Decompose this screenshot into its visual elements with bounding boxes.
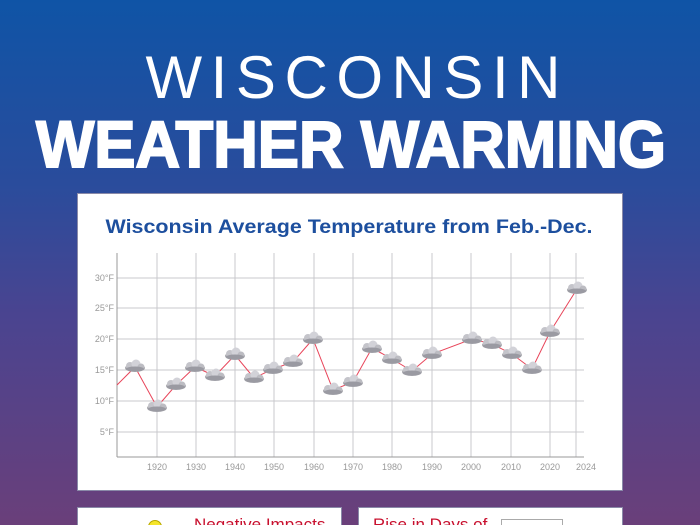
chart title: Wisconsin Average Temperature from Feb.-Dec. <box>106 217 592 238</box>
line chart: 1970 <box>343 462 363 472</box>
line chart: 1940 <box>225 462 245 472</box>
line chart: 25°F <box>95 303 115 313</box>
title: WISCONSIN <box>146 44 560 111</box>
line chart: 15°F <box>95 365 115 375</box>
line chart: 1990 <box>422 462 442 472</box>
panel: rise in days <box>358 507 623 525</box>
line chart: 2020 <box>540 462 560 472</box>
line chart: 2024 <box>576 462 596 472</box>
line chart: 2010 <box>501 462 521 472</box>
line chart: 5°F <box>100 427 114 437</box>
line chart: 1930 <box>186 462 206 472</box>
box <box>501 519 563 525</box>
line chart: 30°F <box>95 273 115 283</box>
line chart: 1950 <box>264 462 284 472</box>
line chart: 1920 <box>147 462 167 472</box>
panel: negative impacts <box>77 507 342 525</box>
icon: sun <box>148 520 162 525</box>
line chart: 1980 <box>382 462 402 472</box>
panel: temperature chart <box>77 193 623 491</box>
title: WEATHER WARMING <box>36 107 666 180</box>
line chart: 1960 <box>304 462 324 472</box>
line chart: 2000 <box>461 462 481 472</box>
line chart: 10°F <box>95 396 115 406</box>
line chart <box>95 253 596 472</box>
line chart: 20°F <box>95 334 115 344</box>
title <box>34 44 666 180</box>
